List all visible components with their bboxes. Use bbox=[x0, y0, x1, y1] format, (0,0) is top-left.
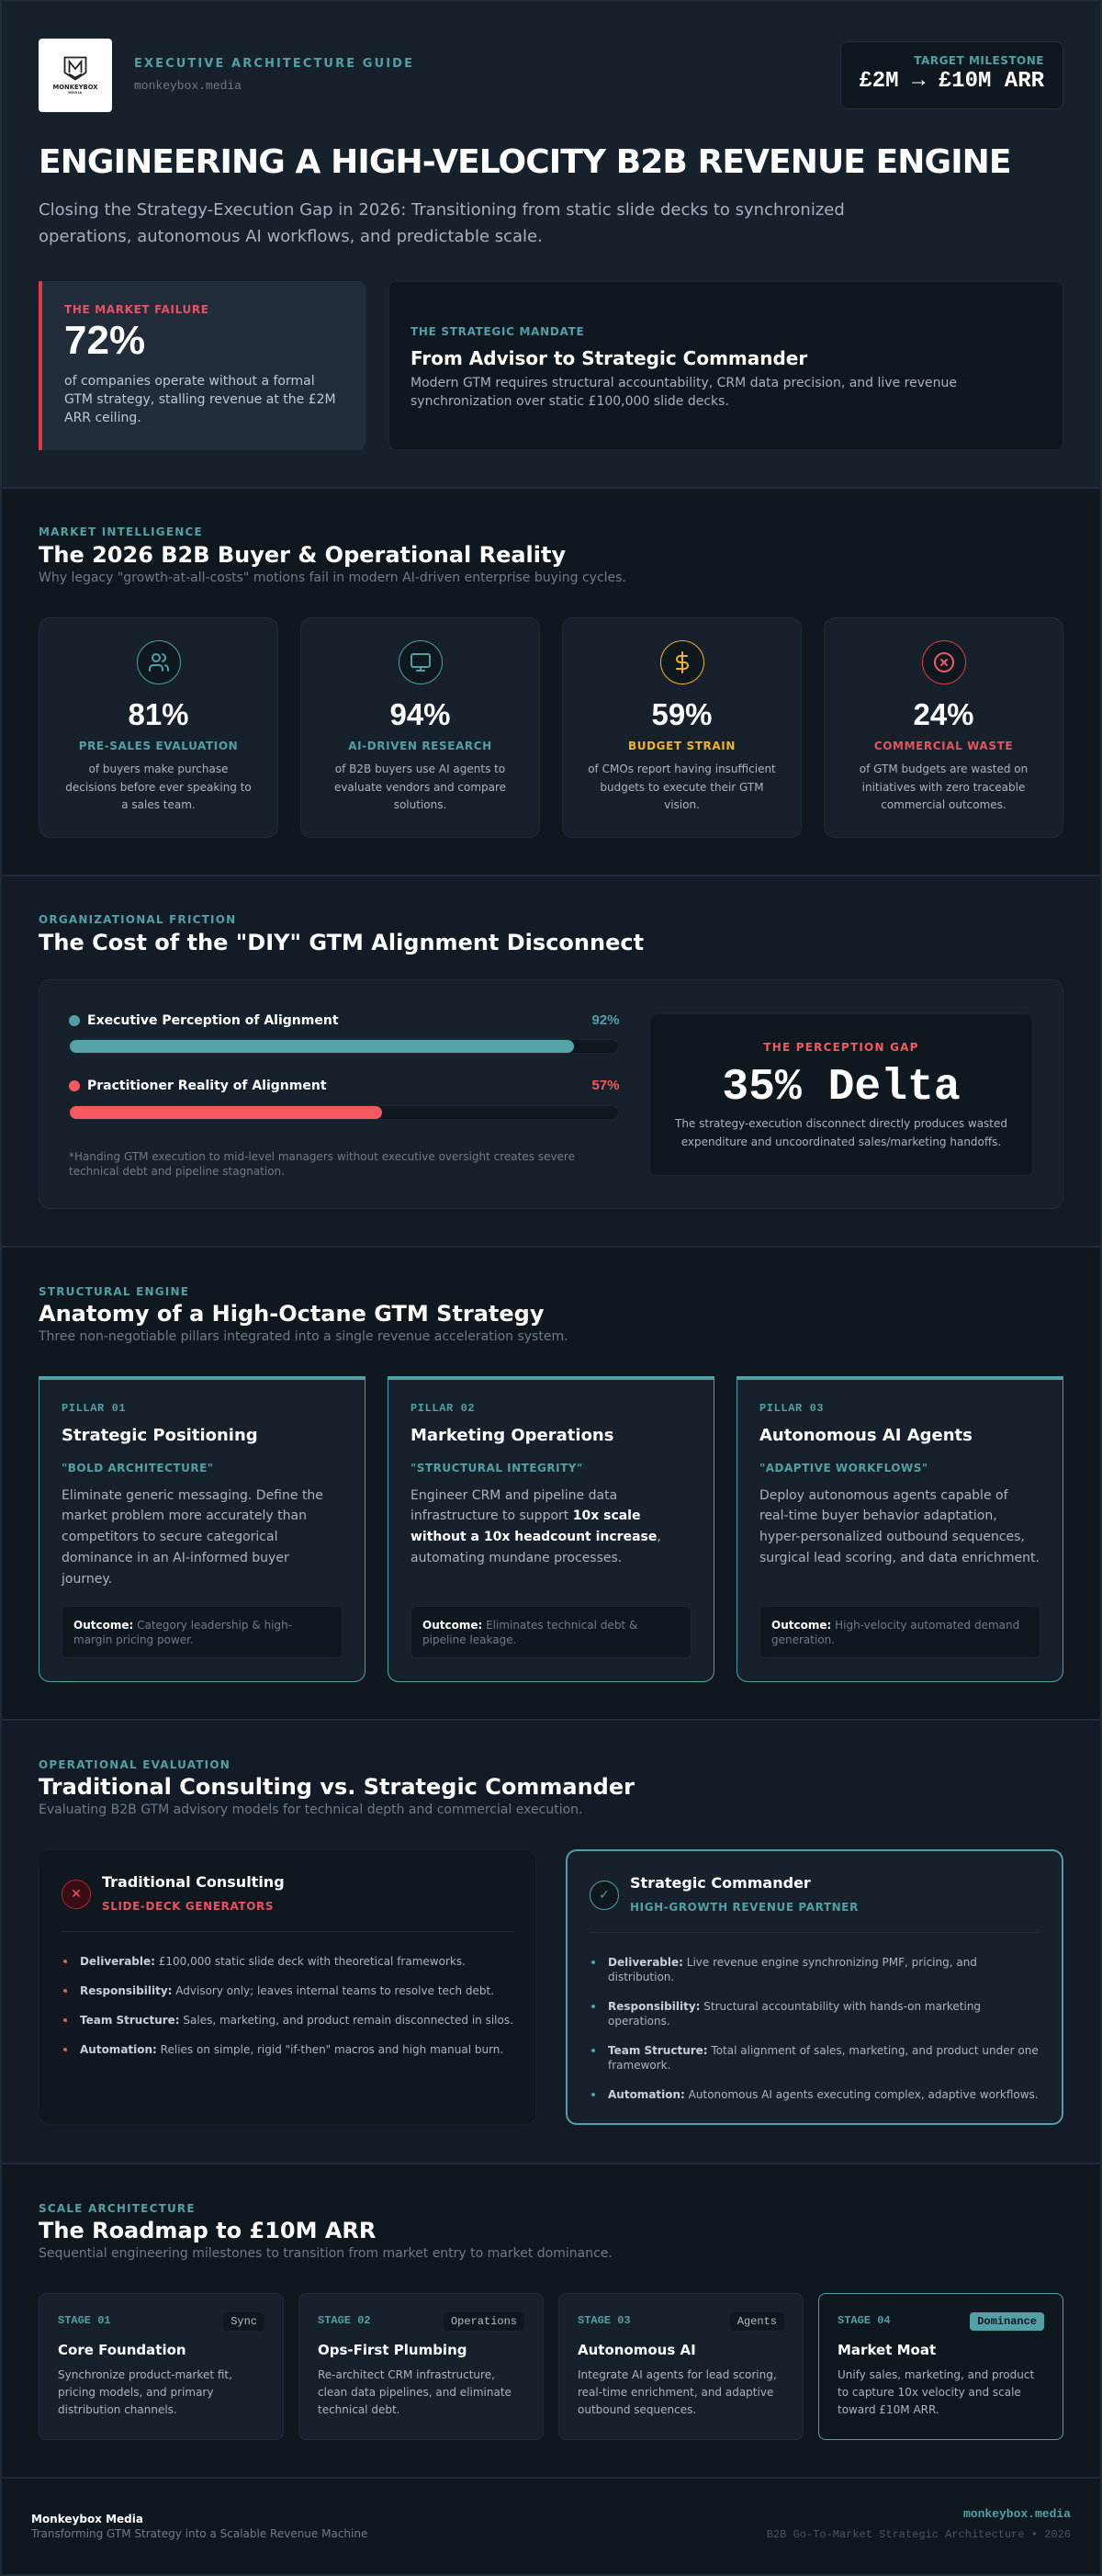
panel: strategic mandate bbox=[388, 281, 1063, 450]
description: ARR ceiling. bbox=[64, 411, 141, 425]
title: ENGINEERING A HIGH-VELOCITY B2B REVENUE ENGINE bbox=[39, 143, 1011, 180]
pillar tagline: "ADAPTIVE WORKFLOWS" bbox=[759, 1462, 928, 1474]
pillar 03 bbox=[737, 1376, 1063, 1682]
bar: executive 92% bbox=[69, 1039, 619, 1054]
stage badge: Dominance bbox=[977, 2315, 1037, 2328]
stat 72%: 72% bbox=[64, 318, 145, 363]
eyebrow: ORGANIZATIONAL FRICTION bbox=[39, 913, 236, 926]
bullet bbox=[63, 1960, 67, 1963]
bullet bbox=[63, 1989, 67, 1993]
pillar number: PILLAR 03 bbox=[759, 1402, 824, 1415]
card title: Strategic Commander bbox=[630, 1874, 811, 1892]
bar fill bbox=[70, 1106, 382, 1119]
heading: Anatomy of a High-Octane GTM Strategy bbox=[39, 1301, 544, 1327]
footer tagline: Transforming GTM Strategy into a Scalable Revenue Machine bbox=[31, 2527, 367, 2540]
description: of buyers make purchase bbox=[89, 763, 228, 775]
list item: team structure bbox=[608, 2044, 1039, 2072]
stage badge bbox=[730, 2312, 784, 2331]
outcome: Outcome: Category leadership & high- bbox=[73, 1619, 292, 1632]
stat card: 81% bbox=[39, 617, 278, 838]
stage description: Integrate AI agents for lead scoring, bbox=[578, 2368, 777, 2381]
stage description: clean data pipelines, and eliminate bbox=[318, 2386, 512, 2399]
description: vision. bbox=[664, 798, 700, 811]
list item: responsibility: Responsibility: Advisory only; leaves internal teams to resolve tech debt. bbox=[80, 1984, 494, 1997]
icon: dollar bbox=[659, 640, 703, 684]
description: evaluate vendors and compare bbox=[334, 781, 506, 794]
eyebrow: MARKET INTELLIGENCE bbox=[39, 525, 203, 538]
stage description: real-time enrichment, and adaptive bbox=[578, 2386, 773, 2399]
roadmap stages bbox=[39, 2293, 1063, 2440]
icon: users bbox=[136, 640, 180, 684]
outcome: Outcome: High-velocity automated demand bbox=[771, 1619, 1019, 1632]
outcome: pipeline leakage. bbox=[422, 1633, 516, 1646]
description: of GTM budgets are wasted on bbox=[860, 763, 1028, 775]
outcome: margin pricing power. bbox=[73, 1633, 194, 1646]
panel: market failure bbox=[39, 281, 365, 450]
list item: automation: Automation: Relies on simple, rigid "if-then" macros and high manual burn. bbox=[80, 2043, 503, 2056]
bullet bbox=[591, 2005, 595, 2008]
icon: cross: ✕ bbox=[71, 1887, 82, 1902]
pillar tagline: "BOLD ARCHITECTURE" bbox=[62, 1462, 214, 1474]
footer domain: monkeybox.media bbox=[963, 2507, 1071, 2521]
logo wordmark: MONKEYBOX bbox=[52, 84, 98, 91]
section description: Evaluating B2B GTM advisory models for technical depth and commercial execution. bbox=[39, 1802, 582, 1817]
stage title: Core Foundation bbox=[58, 2342, 186, 2358]
pillar body: Engineer CRM and pipeline data bbox=[410, 1488, 617, 1503]
pillar body: market problem more accurately than bbox=[62, 1508, 307, 1523]
description bbox=[64, 374, 336, 425]
list item: deliverable: Deliverable: Live revenue engine synchronizing PMF, pricing, and bbox=[608, 1956, 977, 1969]
stage badge: Sync bbox=[231, 2315, 257, 2328]
card subtitle: SLIDE-DECK GENERATORS bbox=[102, 1900, 274, 1913]
description: solutions. bbox=[394, 798, 446, 811]
description: synchronization over static £100,000 slide decks. bbox=[410, 394, 729, 409]
pillar 01 bbox=[39, 1376, 365, 1682]
stage description: outbound sequences. bbox=[578, 2403, 696, 2416]
callout label: THE PERCEPTION GAP bbox=[763, 1041, 919, 1054]
label: THE STRATEGIC MANDATE bbox=[410, 325, 584, 338]
outcome bbox=[410, 1606, 692, 1658]
icon: cross bbox=[62, 1880, 91, 1909]
pillar title: Marketing Operations bbox=[410, 1426, 613, 1445]
section: structural engine bbox=[0, 1248, 1102, 1721]
description bbox=[588, 763, 776, 811]
section: market intelligence bbox=[0, 489, 1102, 876]
footer credit: B2B Go-To-Market Strategic Architecture • 2026 bbox=[767, 2528, 1071, 2541]
pillar body: Eliminate generic messaging. Define the bbox=[62, 1488, 323, 1503]
pillar number: PILLAR 02 bbox=[410, 1402, 475, 1415]
panel: strategic commander bbox=[566, 1849, 1063, 2125]
pillar body: dominance in an AI-informed buyer bbox=[62, 1551, 289, 1565]
stage description: Re-architect CRM infrastructure, bbox=[318, 2368, 495, 2381]
heading: The 2026 B2B Buyer & Operational Reality bbox=[39, 542, 566, 568]
stage description bbox=[838, 2368, 1034, 2416]
stat card: 24% bbox=[824, 617, 1063, 838]
target milestone badge bbox=[840, 41, 1063, 109]
description: commercial outcomes. bbox=[881, 798, 1006, 811]
stat card row bbox=[39, 617, 1063, 838]
stage badge: Agents bbox=[737, 2315, 777, 2328]
stage description: toward £10M ARR. bbox=[838, 2403, 939, 2416]
pillar body bbox=[759, 1488, 1040, 1565]
heading: From Advisor to Strategic Commander bbox=[410, 347, 807, 369]
stage 04 bbox=[818, 2293, 1063, 2440]
pillar body bbox=[410, 1488, 661, 1565]
stage description: technical debt. bbox=[318, 2403, 399, 2416]
stage description: pricing models, and primary bbox=[58, 2386, 213, 2399]
bullet bbox=[63, 2048, 67, 2051]
site domain: monkeybox.media bbox=[134, 79, 242, 93]
outcome bbox=[759, 1606, 1040, 1658]
bar value: 92%: 92% bbox=[591, 1012, 619, 1028]
section description: Three non-negotiable pillars integrated into a single revenue acceleration system. bbox=[39, 1329, 568, 1344]
bar: practitioner 57% bbox=[69, 1105, 619, 1120]
card title: Traditional Consulting bbox=[102, 1873, 285, 1891]
list item: deliverable bbox=[608, 1956, 977, 1983]
section: organizational friction bbox=[0, 876, 1102, 1248]
pillar body: without a 10x headcount increase, bbox=[410, 1530, 661, 1544]
divider bbox=[62, 1931, 514, 1932]
description: a sales team. bbox=[121, 798, 196, 811]
section description: Why legacy "growth-at-all-costs" motions fail in modern AI-driven enterprise buying cycles. bbox=[39, 571, 626, 585]
card subtitle: HIGH-GROWTH REVENUE PARTNER bbox=[630, 1901, 859, 1914]
pillar number: PILLAR 01 bbox=[62, 1402, 126, 1415]
list item: team structure: framework. bbox=[608, 2059, 670, 2072]
description: initiatives with zero traceable bbox=[862, 781, 1025, 794]
bullet bbox=[591, 2093, 595, 2096]
stage number: STAGE 04 bbox=[838, 2314, 891, 2327]
pillar body: hyper-personalized outbound sequences, bbox=[759, 1530, 1025, 1544]
description bbox=[410, 376, 957, 409]
stage description bbox=[578, 2368, 777, 2416]
value: 81% bbox=[128, 697, 189, 731]
pillar body: real-time buyer behavior adaptation, bbox=[759, 1508, 997, 1523]
eyebrow: EXECUTIVE ARCHITECTURE GUIDE bbox=[134, 57, 414, 71]
description bbox=[334, 763, 506, 811]
label: BUDGET STRAIN bbox=[628, 740, 736, 752]
list item: responsibility: Responsibility: Structural accountability with hands-on marketing bbox=[608, 2000, 981, 2013]
list item: responsibility: operations. bbox=[608, 2015, 670, 2028]
description bbox=[860, 763, 1028, 811]
stage description: to capture 10x velocity and scale bbox=[838, 2386, 1021, 2399]
list item: responsibility bbox=[608, 2000, 981, 2028]
eyebrow: STRUCTURAL ENGINE bbox=[39, 1285, 189, 1298]
section: operational evaluation bbox=[0, 1721, 1102, 2164]
stage description bbox=[318, 2368, 512, 2416]
callout: perception gap bbox=[649, 1013, 1033, 1176]
stage title: Market Moat bbox=[838, 2342, 936, 2358]
stage number: STAGE 01 bbox=[58, 2314, 111, 2327]
bullet bbox=[591, 1960, 595, 1964]
description: of CMOs report having insufficient bbox=[588, 763, 776, 775]
logo: Monkeybox Media bbox=[39, 39, 112, 112]
callout description bbox=[674, 1117, 1007, 1148]
stage description bbox=[58, 2368, 232, 2416]
footnote: technical debt and pipeline stagnation. bbox=[69, 1165, 285, 1178]
callout value: 35% Delta bbox=[722, 1063, 961, 1113]
description: of B2B buyers use AI agents to bbox=[335, 763, 505, 775]
value: 59% bbox=[651, 697, 713, 731]
description: decisions before ever speaking to bbox=[65, 781, 252, 794]
stage badge bbox=[970, 2312, 1044, 2331]
stage description: Synchronize product-market fit, bbox=[58, 2368, 232, 2381]
legend dot: practitioner bbox=[69, 1080, 80, 1091]
pillar body: journey. bbox=[62, 1571, 112, 1586]
footnote: *Handing GTM execution to mid-level managers without executive oversight creates severe bbox=[69, 1150, 575, 1163]
stage description: distribution channels. bbox=[58, 2403, 177, 2416]
footnote bbox=[69, 1150, 575, 1178]
description: GTM strategy, stalling revenue at the £2M bbox=[64, 392, 336, 407]
description: Modern GTM requires structural accountability, CRM data precision, and live revenue bbox=[410, 376, 957, 390]
stage description: Unify sales, marketing, and product bbox=[838, 2368, 1034, 2381]
pillar title: Strategic Positioning bbox=[62, 1426, 258, 1445]
heading: Traditional Consulting vs. Strategic Commander bbox=[39, 1774, 635, 1800]
stat card: 59% bbox=[562, 617, 802, 838]
callout description: expenditure and uncoordinated sales/marketing handoffs. bbox=[681, 1135, 1001, 1148]
icon: x circle bbox=[922, 640, 966, 684]
section: hero header bbox=[0, 0, 1102, 489]
stage 02 bbox=[298, 2293, 544, 2440]
pillar body: surgical lead scoring, and data enrichment. bbox=[759, 1551, 1040, 1565]
eyebrow: SCALE ARCHITECTURE bbox=[39, 2202, 196, 2215]
stage badge bbox=[223, 2312, 264, 2331]
list item: automation: Automation: Autonomous AI agents executing complex, adaptive workflows. bbox=[608, 2088, 1039, 2101]
bar label: practitioner: Practitioner Reality of Alignment bbox=[87, 1079, 327, 1093]
panel: traditional consulting bbox=[39, 1849, 536, 2125]
bar label: executive: Executive Perception of Alignment bbox=[87, 1013, 339, 1028]
stage title: Ops-First Plumbing bbox=[318, 2342, 467, 2358]
icon: monitor bbox=[399, 640, 443, 684]
divider bbox=[590, 1932, 1040, 1933]
label: PRE-SALES EVALUATION bbox=[79, 740, 238, 752]
comparison list bbox=[591, 1956, 1039, 2101]
badge value: £2M → £10M ARR bbox=[859, 68, 1044, 94]
pillar body bbox=[61, 1488, 323, 1586]
stage badge bbox=[444, 2312, 524, 2331]
pillar body: Deploy autonomous agents capable of bbox=[759, 1488, 1008, 1503]
list item: deliverable: Deliverable: £100,000 static slide deck with theoretical frameworks. bbox=[80, 1955, 466, 1968]
list item: team structure: Team Structure: Total alignment of sales, marketing, and product under one bbox=[608, 2044, 1039, 2057]
bullet bbox=[591, 2049, 595, 2052]
pillar body: infrastructure to support 10x scale bbox=[410, 1508, 640, 1523]
eyebrow: OPERATIONAL EVALUATION bbox=[39, 1758, 231, 1771]
footer brand: Monkeybox Media bbox=[31, 2513, 143, 2525]
bar fill bbox=[70, 1040, 574, 1053]
footer bbox=[0, 2479, 1102, 2576]
description: budgets to execute their GTM bbox=[600, 781, 764, 794]
pillar body: competitors to secure categorical bbox=[62, 1530, 277, 1544]
stage number: STAGE 02 bbox=[318, 2314, 371, 2327]
badge label: TARGET MILESTONE bbox=[914, 53, 1044, 66]
pillar 02 bbox=[388, 1376, 714, 1682]
stage 01 bbox=[39, 2293, 284, 2440]
stat card: 94% bbox=[300, 617, 540, 838]
pillar tagline: "STRUCTURAL INTEGRITY" bbox=[410, 1462, 583, 1474]
section description: Sequential engineering milestones to transition from market entry to market dominance. bbox=[39, 2246, 613, 2261]
pillar title: Autonomous AI Agents bbox=[759, 1426, 973, 1445]
outcome: generation. bbox=[771, 1633, 835, 1646]
logo sub wordmark: MEDIA bbox=[68, 91, 83, 95]
icon: check bbox=[590, 1881, 619, 1910]
bullet bbox=[63, 2018, 67, 2022]
legend dot: executive bbox=[69, 1015, 80, 1026]
outcome: Outcome: Eliminates technical debt & bbox=[422, 1619, 637, 1632]
description bbox=[65, 763, 252, 811]
panel: alignment comparison bbox=[39, 979, 1063, 1209]
icon: shield mark bbox=[64, 57, 86, 81]
list item: deliverable: distribution. bbox=[608, 1971, 674, 1983]
description: of companies operate without a formal bbox=[64, 374, 315, 389]
stage number: STAGE 03 bbox=[578, 2314, 631, 2327]
subtitle: operations, autonomous AI workflows, and predictable scale. bbox=[39, 227, 543, 246]
label: COMMERCIAL WASTE bbox=[874, 740, 1013, 752]
icon: check: ✓ bbox=[599, 1888, 610, 1903]
subtitle: Closing the Strategy-Execution Gap in 2026: Transitioning from static slide decks to synchronized bbox=[39, 200, 845, 220]
value: 94% bbox=[389, 697, 451, 731]
stage title: Autonomous AI bbox=[578, 2342, 696, 2358]
value: 24% bbox=[913, 697, 974, 731]
comparison list bbox=[63, 1955, 513, 2056]
subtitle bbox=[39, 200, 845, 246]
heading: The Cost of the "DIY" GTM Alignment Disconnect bbox=[39, 930, 644, 955]
label: AI-DRIVEN RESEARCH bbox=[348, 740, 492, 752]
heading: The Roadmap to £10M ARR bbox=[39, 2218, 376, 2243]
outcome bbox=[62, 1606, 343, 1658]
callout description: The strategy-execution disconnect directly produces wasted bbox=[675, 1117, 1007, 1130]
section: scale architecture bbox=[0, 2164, 1102, 2479]
bar value: 57%: 57% bbox=[591, 1078, 619, 1093]
stage 03 bbox=[558, 2293, 804, 2440]
list item: team structure: Team Structure: Sales, marketing, and product remain disconnected in silos. bbox=[80, 2014, 513, 2027]
stage badge: Operations bbox=[451, 2315, 517, 2328]
label: THE MARKET FAILURE bbox=[64, 303, 209, 316]
pillar body: automating mundane processes. bbox=[410, 1551, 622, 1565]
